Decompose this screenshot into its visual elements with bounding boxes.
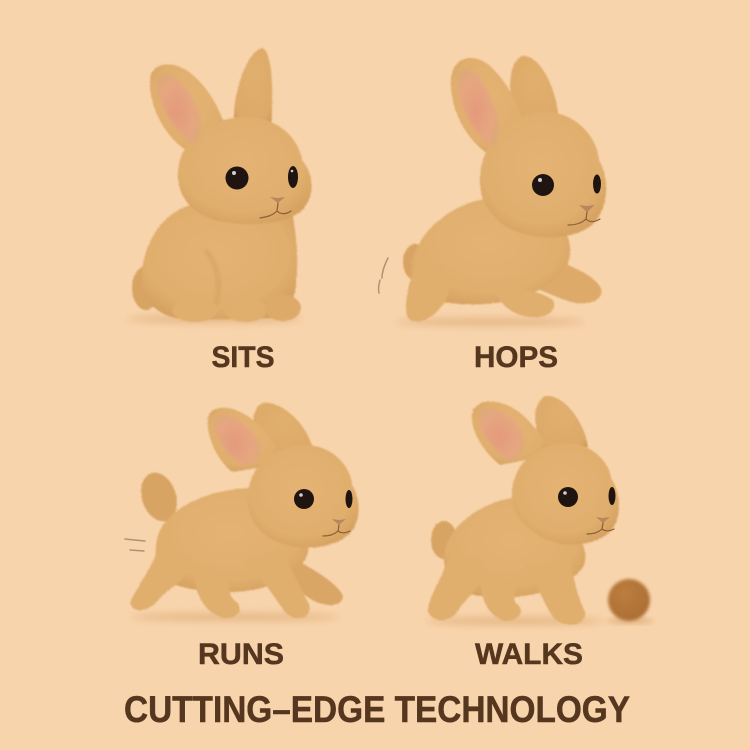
- body: [142, 205, 297, 320]
- front leg: [525, 560, 585, 625]
- nose and mouth: [568, 205, 600, 225]
- front ear: [472, 401, 550, 465]
- head: [480, 112, 606, 238]
- nose and mouth: [323, 519, 350, 536]
- head: [512, 443, 619, 545]
- title: CUTTING–EDGE TECHNOLOGY: [124, 689, 630, 730]
- eyes: [294, 489, 352, 509]
- front ear: [150, 64, 225, 153]
- body: [444, 497, 585, 597]
- label: runs: RUNS: [198, 638, 284, 671]
- front ear: [451, 58, 525, 154]
- tail: [132, 266, 160, 310]
- haunch seam: [205, 250, 219, 308]
- front paw: [530, 255, 601, 303]
- ground shadow: [425, 617, 605, 625]
- middle paw: [490, 280, 554, 317]
- back ear: [253, 403, 313, 458]
- nose and mouth: [587, 517, 614, 534]
- inner ear: [214, 414, 260, 466]
- head: [178, 117, 312, 224]
- label: hops: HOPS: [474, 341, 558, 374]
- tail: [135, 468, 183, 526]
- inner ear: [458, 69, 498, 146]
- label: sits: SITS: [212, 341, 274, 374]
- bunny: hops: [379, 56, 606, 326]
- bunny: runs: [125, 403, 359, 621]
- bunny: walks: [425, 396, 654, 625]
- back ear: [510, 56, 559, 128]
- eyes: [558, 487, 616, 507]
- nose and mouth: [260, 197, 291, 218]
- label: walks: WALKS: [475, 638, 583, 671]
- motion lines: [379, 258, 388, 293]
- ball shadow: [606, 618, 654, 624]
- tail: [403, 244, 427, 280]
- middle leg: [480, 582, 521, 621]
- back ear: [234, 48, 272, 126]
- body: [411, 198, 570, 304]
- middle leg: [195, 575, 240, 618]
- front leg: [245, 550, 310, 618]
- inner ear: [478, 408, 524, 460]
- far front leg: [282, 560, 343, 605]
- ball: [608, 579, 650, 621]
- head: [248, 445, 359, 548]
- body: [156, 488, 309, 592]
- ground shadow: [127, 315, 303, 323]
- motion lines: [125, 539, 145, 551]
- eyes: [226, 166, 298, 190]
- ground shadow: [130, 613, 340, 621]
- tail: [431, 521, 457, 559]
- rear leg: [406, 261, 449, 322]
- bunny: sits: [127, 48, 312, 323]
- rear leg: [428, 555, 484, 620]
- feet: [172, 298, 218, 322]
- ground shadow: [395, 318, 585, 326]
- rear leg: [130, 545, 191, 610]
- inner ear: [157, 74, 200, 144]
- front ear: [208, 408, 282, 472]
- eyes: [532, 174, 601, 196]
- back ear: [535, 396, 588, 450]
